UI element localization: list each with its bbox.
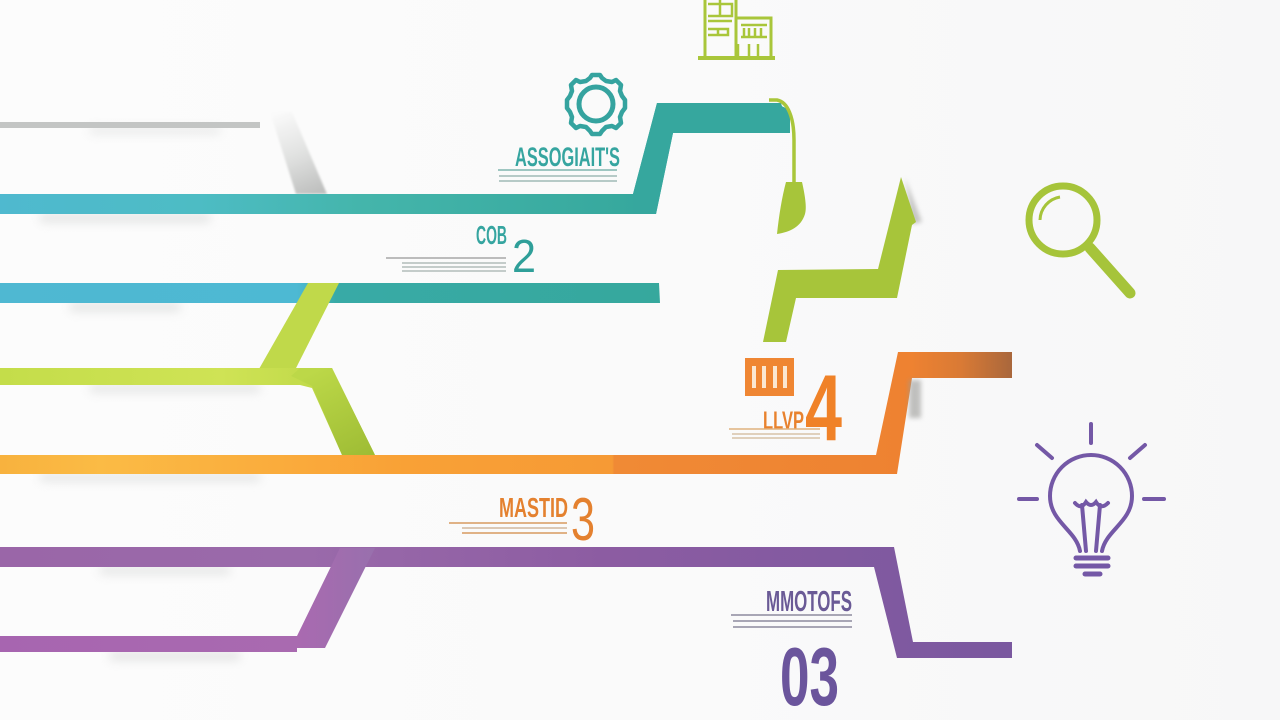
label: cob 2: 2 xyxy=(512,230,536,282)
label: orange 4 xyxy=(729,355,842,460)
orange band xyxy=(0,352,1012,474)
label: orange 4: LLVP xyxy=(763,407,804,435)
label: motofs 03: MMOTOFS xyxy=(766,586,852,618)
label: cob 2: COB xyxy=(476,220,507,250)
teal band 1 xyxy=(0,103,790,214)
icon: magnifier xyxy=(1029,186,1130,293)
lime connector lower xyxy=(291,368,375,455)
green arrow xyxy=(763,177,916,342)
orange band fold shadow xyxy=(909,380,921,418)
label: associates xyxy=(498,142,620,181)
icon: light bulb xyxy=(1019,424,1164,574)
teal band 1 upper part xyxy=(633,103,790,214)
teal band 2 xyxy=(0,283,660,303)
label: orange 4: 4 xyxy=(805,355,842,460)
icon: orange box xyxy=(745,358,794,396)
purple lower band xyxy=(0,548,375,652)
label: associates: ASSOGIAIT'S xyxy=(515,142,620,172)
band shadows xyxy=(40,128,260,660)
purple band xyxy=(0,547,1012,658)
gray faded strip xyxy=(0,112,327,194)
label: master 3 xyxy=(449,486,595,553)
icon: gear xyxy=(567,75,625,134)
lime band xyxy=(0,368,375,455)
label: master 3: MASTID xyxy=(499,492,568,523)
lime connector upper xyxy=(259,283,339,376)
label: cob 2 xyxy=(386,220,536,282)
green arrow shadow xyxy=(905,178,922,224)
label: master 3: 3 xyxy=(571,486,595,553)
green hanging cord and brush xyxy=(769,100,806,234)
icon: building xyxy=(698,0,775,58)
label: motofs 03 xyxy=(731,586,852,720)
